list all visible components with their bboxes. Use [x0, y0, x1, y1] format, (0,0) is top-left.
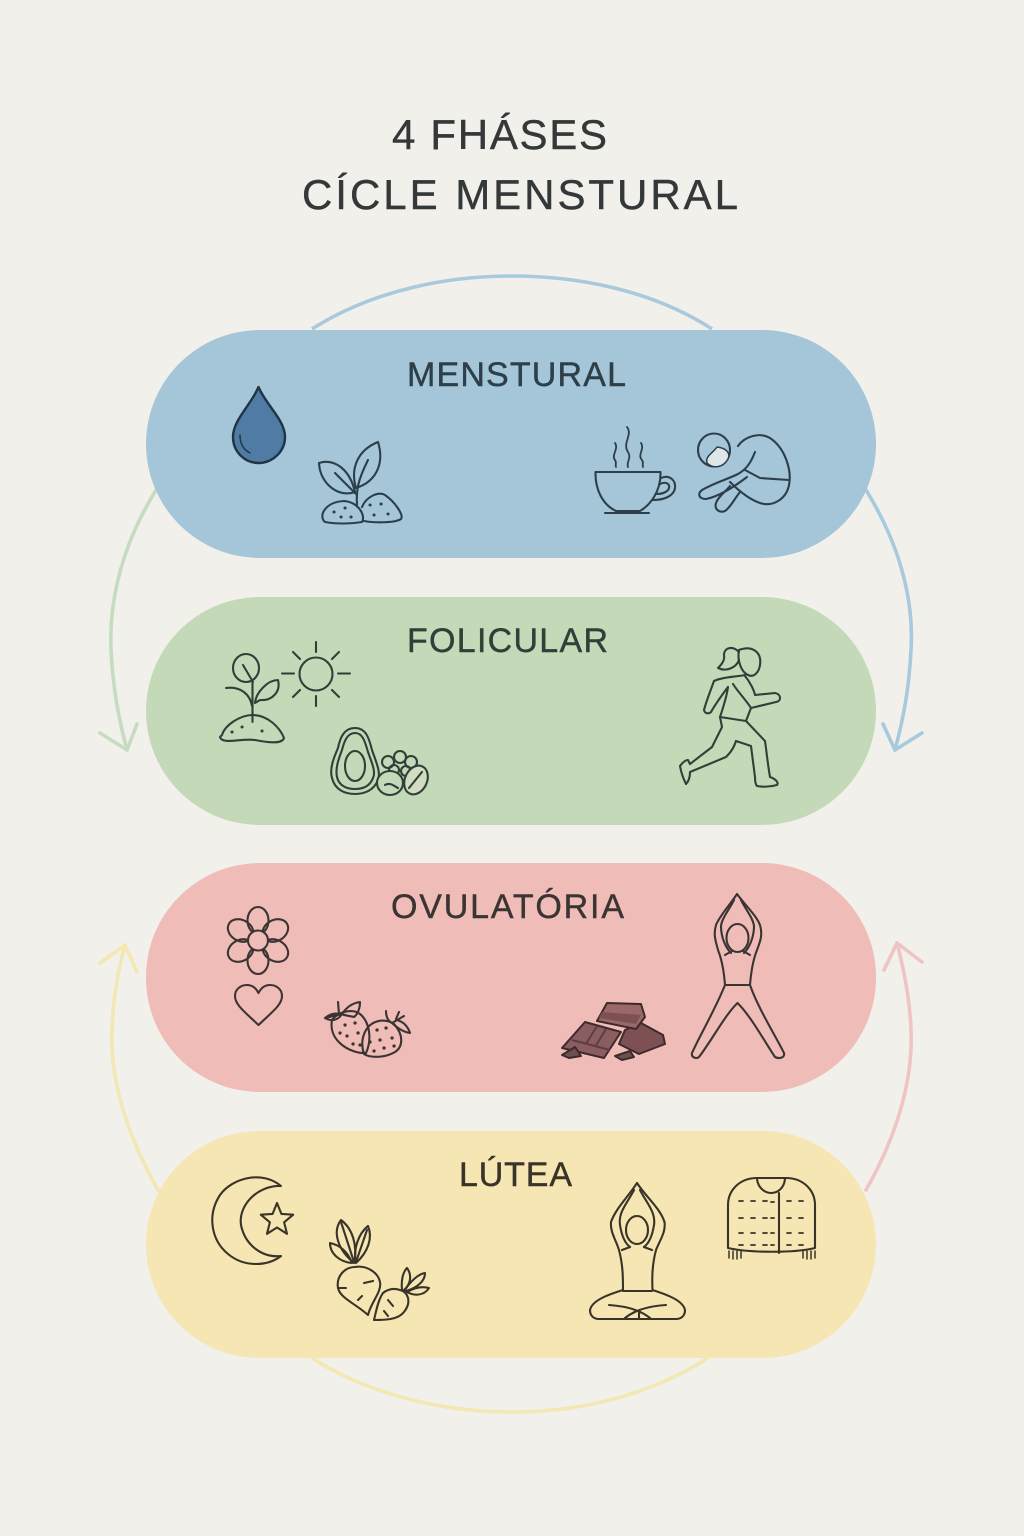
arrow: right pink arc into ovulatoria: [866, 943, 922, 1190]
title: 4 FHÁSES: [392, 111, 607, 158]
icon: strawberries: [325, 1002, 410, 1057]
title: [302, 111, 738, 218]
pill: lutea background: [146, 1131, 876, 1358]
icon: hot cup: [595, 427, 675, 513]
icon: avocado and greens: [331, 728, 432, 798]
arrow: left yellow arc into ovulatoria: [100, 945, 158, 1190]
icon: beets: [330, 1220, 429, 1320]
arc: bottom yellow connector: [312, 1358, 708, 1412]
arc: top blue connector: [312, 276, 712, 329]
icon: sprout in soil: [220, 654, 284, 742]
icon: seedling in soil: [319, 442, 402, 524]
icon: moon and star: [212, 1177, 293, 1264]
arrow: left green arc into folicular: [100, 490, 156, 750]
title: CÍCLE MENSTURAL: [302, 171, 738, 218]
pill: folicular background: [146, 597, 876, 825]
icon: runner: [680, 648, 780, 787]
icon: seated meditation pose: [590, 1183, 685, 1319]
heading: ovulatoria: OVULATÓRIA: [391, 888, 624, 926]
heading: menstrual: MENSTURAL: [407, 356, 626, 394]
heading: lutea: LÚTEA: [459, 1156, 572, 1194]
panel: lutea: [146, 1131, 876, 1358]
icon: standing stretch pose: [692, 894, 784, 1058]
icon: blood drop: [233, 387, 285, 463]
icon: flower: [224, 907, 292, 974]
icon: curled person: [698, 434, 790, 512]
icon: chocolate pieces: [562, 1003, 665, 1060]
panel: ovulatoria: [146, 863, 876, 1092]
arrow: right blue arc into folicular: [866, 490, 922, 750]
pill: ovulatoria background: [146, 863, 876, 1092]
panel: folicular: [146, 597, 876, 825]
icon: cardigan: [728, 1178, 815, 1259]
pill: menstrual background: [146, 330, 876, 558]
icon: heart: [235, 985, 282, 1025]
heading: folicular: FOLICULAR: [407, 622, 608, 660]
icon: sun: [282, 642, 350, 706]
panel: menstrual: [146, 330, 876, 558]
